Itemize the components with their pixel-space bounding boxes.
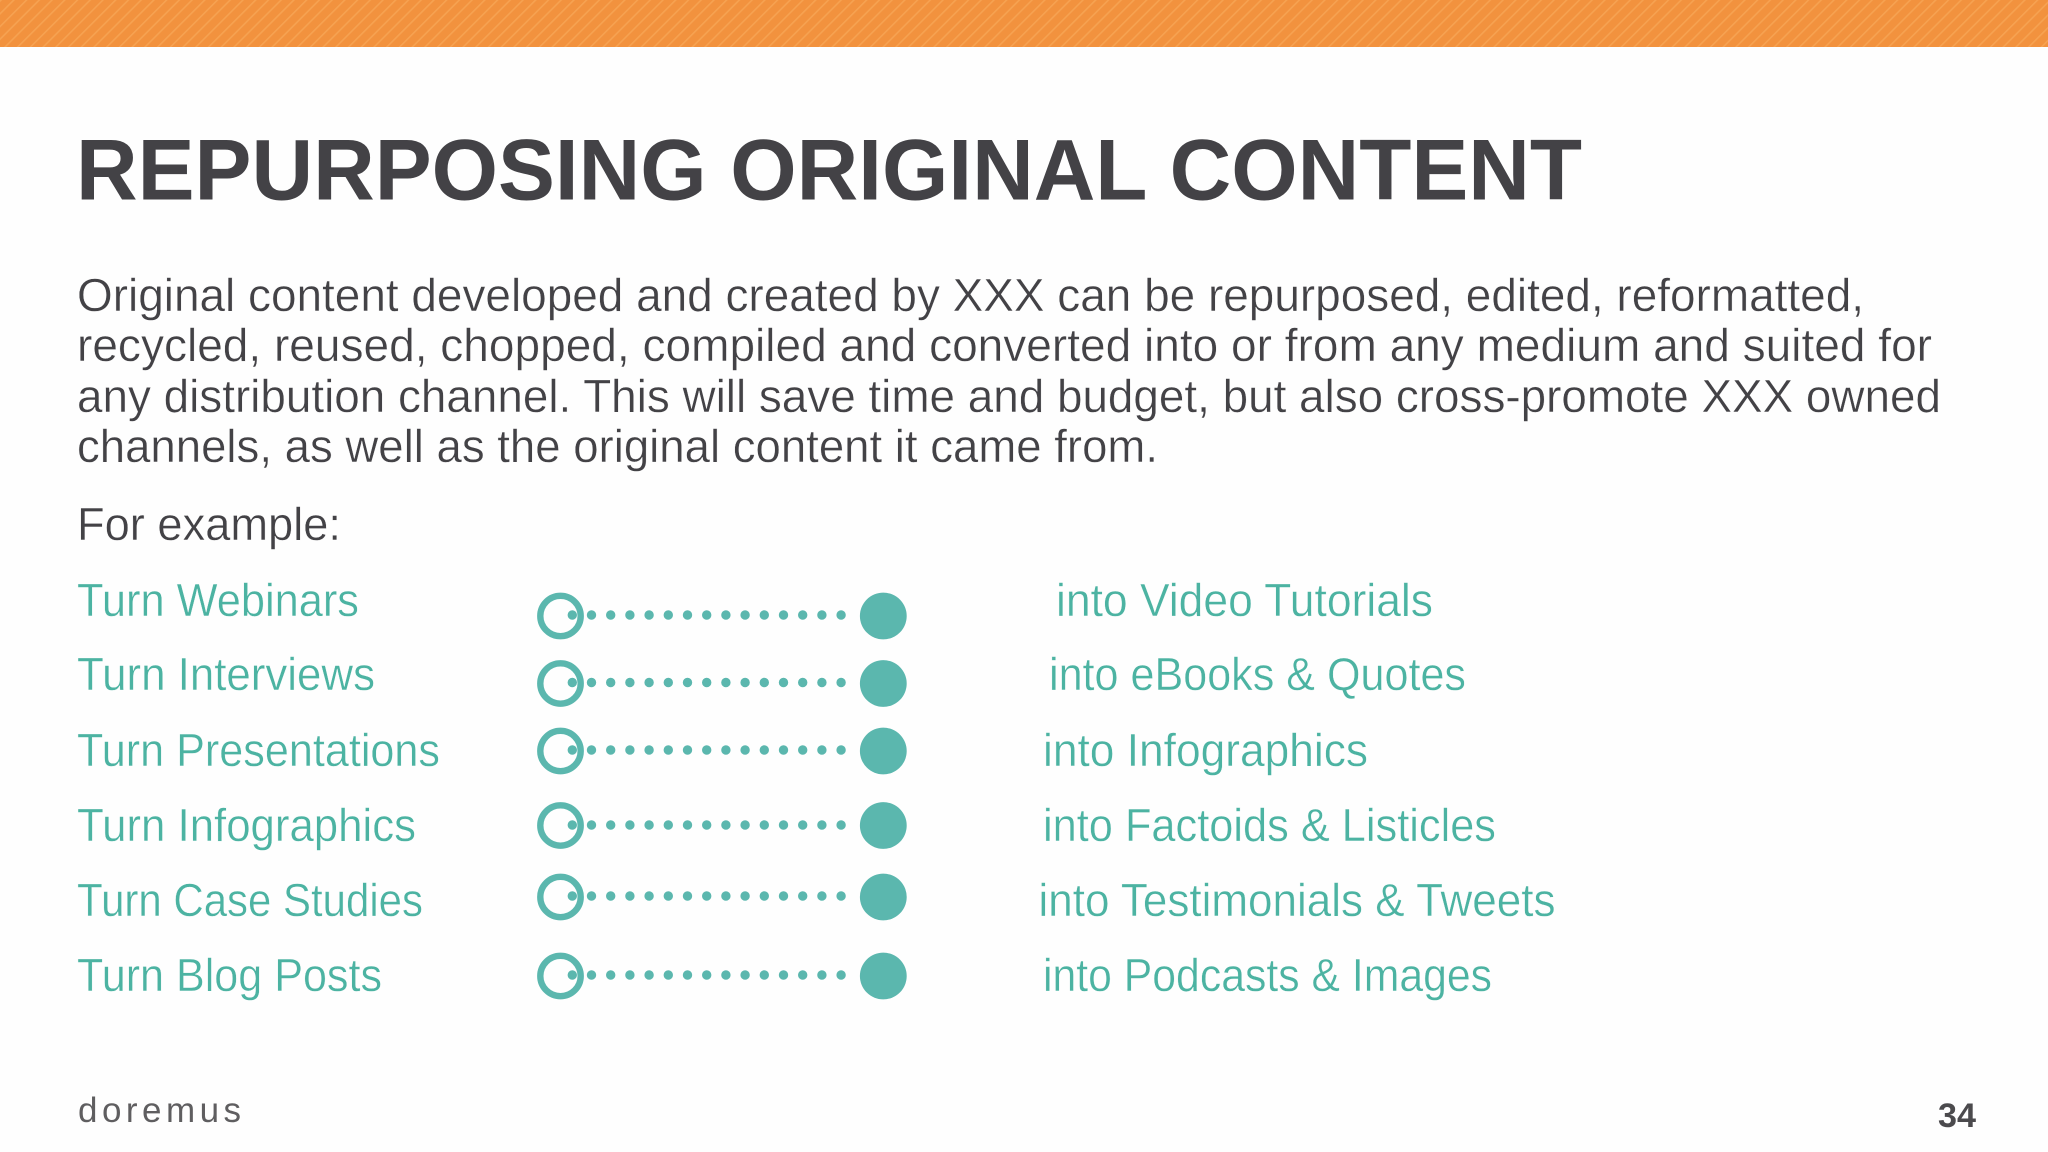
row: webinars to video tutorials	[77, 574, 1433, 639]
icon: filled circle	[860, 874, 907, 920]
target label: into Video Tutorials	[1056, 574, 1433, 626]
source label: Turn Presentations	[77, 724, 440, 776]
row: infographics to factoids and listicles	[77, 799, 1496, 851]
dotted connector	[572, 678, 842, 687]
row: presentations to infographics	[77, 724, 1368, 776]
for example label: For example:	[77, 498, 341, 550]
row: interviews to ebooks and quotes	[77, 648, 1466, 707]
target label: into Infographics	[1043, 724, 1368, 776]
icon: filled circle	[860, 660, 907, 707]
logo: doremus wordmark: doremus	[78, 1091, 241, 1130]
icon: filled circle	[860, 953, 907, 999]
dotted connector	[572, 745, 842, 755]
icon: open circle	[540, 596, 581, 636]
intro paragraph: any distribution channel. This will save time and budget, but also cross-promote XXX owned	[77, 370, 1941, 422]
row: case studies to testimonials and tweets	[77, 874, 1556, 926]
icon: open circle	[540, 731, 581, 771]
row: blog posts to podcasts and images	[77, 949, 1492, 1001]
target label: into Factoids & Listicles	[1043, 799, 1496, 851]
icon: open circle	[540, 956, 581, 996]
title: REPURPOSING ORIGINAL CONTENT	[76, 122, 1582, 218]
icon: open circle	[540, 805, 581, 846]
page number: 34	[1938, 1097, 1976, 1135]
source label: Turn Infographics	[77, 799, 416, 851]
dotted connector	[572, 970, 842, 980]
source label: Turn Case Studies	[77, 874, 423, 926]
target label: into Testimonials & Tweets	[1038, 874, 1556, 926]
icon: filled circle	[860, 593, 907, 639]
orange header band	[0, 0, 2048, 47]
source label: Turn Webinars	[77, 574, 359, 626]
source label: Turn Blog Posts	[77, 949, 382, 1001]
icon: filled circle	[860, 728, 907, 774]
target label: into eBooks & Quotes	[1049, 648, 1466, 700]
icon: filled circle	[860, 802, 907, 849]
icon: open circle	[540, 663, 581, 704]
icon: open circle	[540, 877, 581, 917]
dotted connector	[572, 891, 842, 901]
target label: into Podcasts & Images	[1043, 949, 1492, 1001]
intro paragraph: Original content developed and created by XXX can be repurposed, edited, reformatted,	[77, 269, 1864, 321]
source label: Turn Interviews	[77, 648, 375, 700]
dotted connector	[572, 610, 842, 620]
intro paragraph	[77, 269, 1941, 472]
intro paragraph: channels, as well as the original content it came from.	[77, 420, 1158, 472]
dotted connector	[572, 820, 842, 830]
intro paragraph: recycled, reused, chopped, compiled and converted into or from any medium and suited for	[77, 319, 1932, 371]
